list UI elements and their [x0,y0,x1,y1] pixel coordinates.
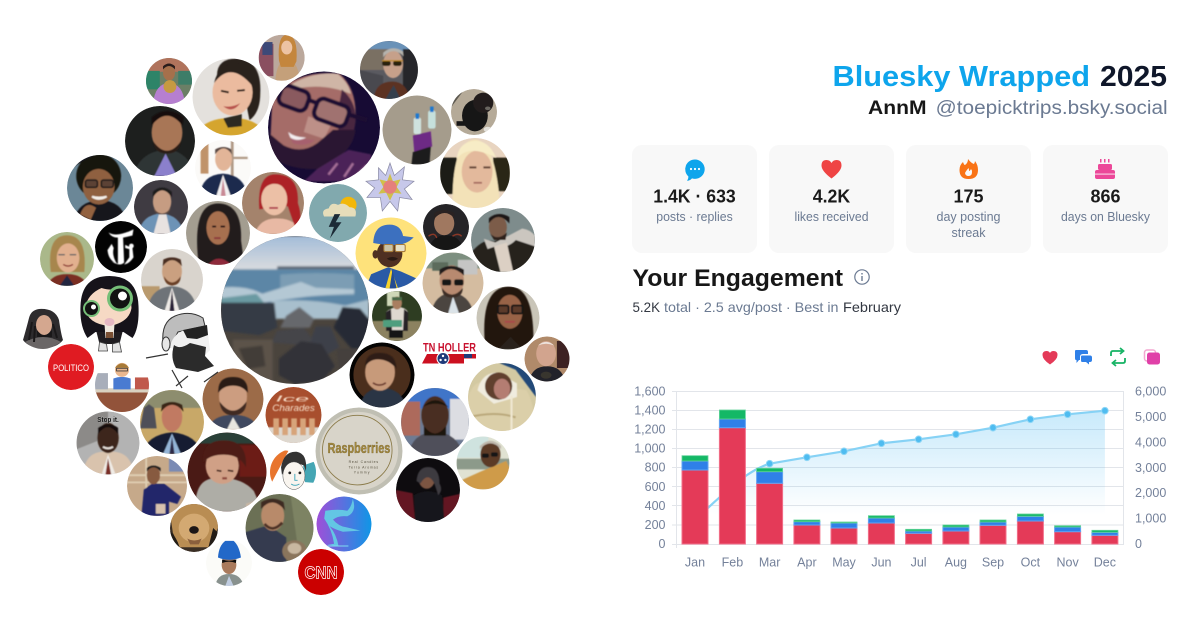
month labels: Sep [982,556,1004,570]
avatar: sketched man with sunglasses [146,313,218,388]
avatar: woman with afro and glasses [67,154,133,221]
avatar: smiling man purple tint [267,72,380,184]
avatar: blonde woman looking up [440,138,510,208]
avatar: cartoon face teal and orange [270,450,316,490]
avatar: skater silhouette on gradient [316,496,372,552]
left axis labels: 1,600 [634,384,666,398]
title: Bluesky Wrapped 2025: 2025 [1100,61,1167,93]
engagement summary text: total · 2.5 avg/post · Best in [664,299,838,315]
avatar: man in cream suit with caption: Stop it. [97,417,119,424]
icon: heart [822,160,842,178]
line points [766,407,1108,467]
month labels: Apr [797,556,817,570]
avatar: toddler in grey shirt [188,432,266,512]
stat card: day posting streak [906,145,1031,253]
avatar: man with hoodie and buildings [401,388,469,456]
left axis labels: 1,000 [634,442,666,456]
month labels: Feb [722,556,743,570]
stat card: posts and replies: posts · replies [656,210,733,224]
avatar: man among bookshelves [127,456,187,516]
right axis labels: 0 [1135,537,1142,551]
month labels: Aug [945,556,967,570]
avatar: long haired cartoon man [23,309,63,349]
left axis labels: 400 [645,499,666,513]
avatar: monkey in coat [468,363,536,431]
stat card: day posting streak: streak [952,226,986,240]
avatar: Raspberries tin: Real Candies [349,460,378,464]
panel: avatar bubble cluster [23,35,570,595]
avatar: man dark shirt [423,204,469,250]
logo: TN Holler [422,340,476,364]
avatar: politician with capitol [140,390,204,454]
stacked bars: likes [682,428,1118,544]
avatar: man sunglasses beard [422,252,484,314]
avatar: Ice Charades poster [266,387,322,444]
icon: chat bubble [685,159,705,181]
user name and handle: @toepicktrips.bsky.social [936,98,1168,119]
right axis labels: 4,000 [1135,436,1166,450]
avatar: Ice Charades poster: Charades [272,403,315,413]
avatar: woman curly hair glasses [476,286,540,350]
icon: quotes legend squares [1144,350,1160,364]
avatar: feet and bottles on pavement [382,96,452,164]
left axis labels [634,384,666,551]
right axis labels: 2,000 [1135,486,1166,500]
stat card: day posting streak: 175 [954,186,984,206]
avatar: storm cloud icon [309,184,367,242]
avatar: New York Times logo [95,221,147,273]
month labels: Nov [1056,556,1079,570]
month labels: Dec [1094,556,1116,570]
stat card: posts and replies: 1.4K · 633 [653,186,736,206]
avatar: person with bicycle in woods [372,291,422,341]
right axis labels [1135,384,1166,551]
avatar: man in grey suit [141,249,203,311]
avatar: red haired woman [242,172,304,234]
icon: flame [960,159,978,179]
grid lines [672,391,1124,548]
right axis labels: 1,000 [1135,512,1166,526]
heading: Your Engagement: Your Engagement [632,265,843,292]
stat card: posts and replies [632,145,757,253]
logo: Politico [48,344,94,390]
left axis labels: 0 [659,537,666,551]
avatar: large coastal rocks photo [221,236,369,384]
right axis labels: 3,000 [1135,461,1166,475]
logo: CNN [298,549,344,595]
engagement summary text: February [843,299,901,315]
avatar: woman blonde bob with glasses [40,232,94,286]
stacked bars: replies [682,419,1118,535]
stat card: days on Bluesky: 866 [1090,186,1120,206]
avatar: black dog [451,89,497,135]
avatar: man with sunglasses on street [360,41,418,99]
avatar: man with party hat [206,540,252,586]
right axis labels: 6,000 [1135,384,1166,398]
logo: CNN: CNN [304,562,338,582]
avatar: man with cross [200,141,249,196]
title: Bluesky Wrapped 2025: Bluesky Wrapped [832,61,1090,93]
month labels [685,556,1116,570]
month labels: Jan [685,556,705,570]
icon: info [855,270,869,284]
stat card: likes received: likes received [794,210,869,224]
stat card: likes received: 4.2K [813,186,850,206]
month labels: Mar [759,556,780,570]
avatar: woman smiling yellow top [192,58,270,136]
avatar: man with blanket [471,208,535,272]
avatar: Raspberries tin: Yummy [354,471,370,475]
avatar: Powerpuff cartoon girl [80,276,139,352]
month labels: May [832,556,857,570]
icon: reposts legend arrows [1111,348,1125,366]
avatar: golden dog [170,504,218,552]
avatar: cartoon man yellow background [356,218,426,288]
avatar: woman in black dress [396,458,460,522]
left axis labels: 1,400 [634,404,666,418]
logo: TN Holler: TN HOLLER [423,340,476,354]
chart legend icons [1042,348,1160,366]
avatar: man in cream suit with caption [76,412,140,474]
chart: monthly engagement bars and cumulative line [634,384,1166,570]
stat card: days on Bluesky [1043,145,1168,253]
avatar: man in blue blazer [134,180,188,234]
icon: likes legend heart [1042,351,1058,364]
engagement summary text [632,299,901,315]
left axis labels: 800 [645,460,666,474]
left axis labels: 1,200 [634,422,666,436]
avatar: bitmoji man at desk [95,358,149,412]
avatar: older bald man [524,336,570,382]
right axis labels: 5,000 [1135,410,1166,424]
avatar: Raspberries tin [316,408,402,494]
left axis labels: 600 [645,480,666,494]
stacked bars: reposts [682,410,1118,532]
avatar: Raspberries tin: Terra Aromas [349,465,378,469]
avatar: Raspberries tin: Raspberries [328,441,390,457]
stat card: day posting streak: day posting [936,210,1001,224]
month labels: Jul [911,556,927,570]
avatar: Ice Charades poster: Ice [276,394,310,404]
avatar: bearded man dark background [125,106,195,176]
logo: Politico: POLITICO [53,363,89,373]
avatar: man with dog outdoors [246,494,314,562]
stat card: days on Bluesky: days on Bluesky [1061,210,1151,224]
icon: replies legend bubbles [1075,350,1092,364]
icon: birthday cake [1095,159,1115,179]
month labels: Jun [871,556,892,570]
avatar: bearded man brick wall [202,368,264,430]
user name and handle: AnnM [868,98,926,119]
stat card: likes received [769,145,894,253]
avatar: man with coconut [146,58,192,104]
avatar: man sunglasses orange shirt [456,436,510,490]
avatar: starmie star [366,163,414,211]
left axis labels: 200 [645,518,666,532]
avatar: man in black ring [350,342,414,408]
avatar: girl with flag [259,35,305,81]
area under cumulative line [695,411,1105,544]
cumulative line [695,411,1105,521]
engagement summary text: 5.2K [632,299,661,315]
month labels: Oct [1021,556,1041,570]
avatar: woman long dark hair [186,201,250,265]
